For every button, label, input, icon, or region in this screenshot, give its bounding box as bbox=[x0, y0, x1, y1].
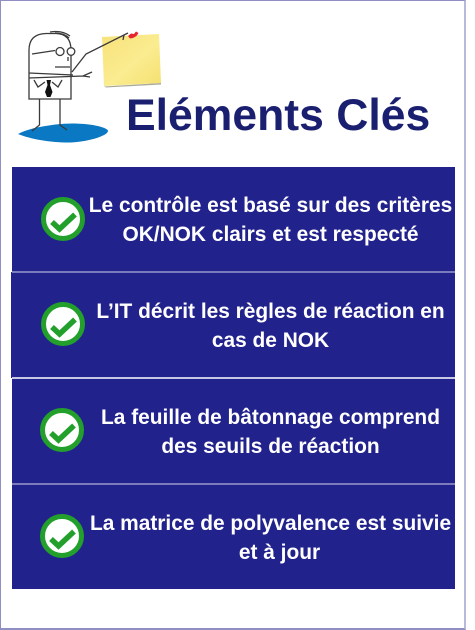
text: règles: cas de NOK bbox=[212, 328, 329, 352]
text: bâtonnage bbox=[101, 406, 440, 458]
text: bâtonnage: La feuille de bâtonnage comprend bbox=[101, 406, 440, 429]
icon: blue ground ellipse bbox=[18, 123, 108, 143]
icon: green check bbox=[41, 197, 85, 241]
text: matrice bbox=[90, 512, 451, 564]
text: critères bbox=[89, 194, 452, 246]
icon: green check bbox=[41, 302, 85, 346]
icon: yellow sticky note bbox=[102, 34, 161, 88]
text: règles: L’IT décrit les règles de réaction en bbox=[96, 300, 445, 323]
text: matrice: et à jour bbox=[239, 540, 320, 564]
icon: red pin bbox=[128, 32, 138, 38]
text: bâtonnage: des seuils de réaction bbox=[161, 434, 380, 458]
panel: critères de contrôle bbox=[12, 167, 455, 272]
panel: règles de réaction bbox=[11, 272, 455, 378]
text: règles bbox=[96, 300, 445, 352]
icon: man figure bbox=[29, 32, 128, 131]
panel: feuille de bâtonnage bbox=[12, 379, 455, 484]
text: critères: Le contrôle est basé sur des critères bbox=[89, 194, 452, 217]
icon: tie bbox=[45, 80, 52, 97]
text: matrice: La matrice de polyvalence est suivie bbox=[90, 512, 451, 535]
title: Eléments Clés bbox=[126, 91, 430, 140]
text: critères: OK/NOK clairs et est respecté bbox=[122, 222, 419, 246]
icon: green check bbox=[40, 408, 84, 452]
illustration: cartoon man pointing at sticky note bbox=[18, 30, 161, 142]
panel: matrice de polyvalence bbox=[12, 484, 455, 589]
icon: green check bbox=[40, 514, 84, 558]
